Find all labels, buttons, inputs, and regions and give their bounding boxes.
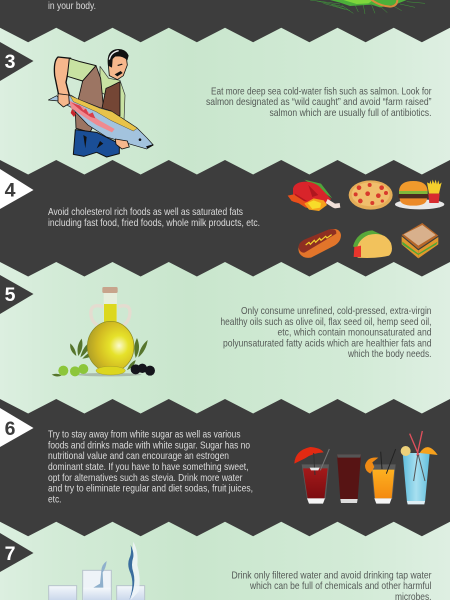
tip 6 text: nutritional value and can encourage an estrogen: [48, 451, 229, 462]
tip 4 text: including fast food, fried foods, whole milk products, etc.: [48, 218, 260, 229]
olive branches: [70, 338, 148, 370]
tip 6 text: and try to eliminate regular and diet sodas, fruit juices,: [48, 483, 253, 494]
body: [87, 321, 134, 372]
tip 6 text: dominant state. If you have to have something sweet,: [48, 462, 248, 473]
tip 7 text: [232, 571, 432, 600]
glass: with splash: [117, 542, 145, 600]
illustration: glasses of water: [49, 542, 145, 600]
tip 2 text: in your body.: [48, 1, 96, 12]
number badge 4: [0, 169, 34, 209]
shadow: [75, 373, 142, 376]
number badge 6: 6: [5, 418, 16, 440]
glass: half filled: [83, 561, 111, 600]
tip 6 text: Try to stay away from white sugar as well as various: [48, 430, 240, 441]
icon: taco: [353, 230, 392, 258]
icon: chicken leg: [288, 180, 340, 211]
illustration: olive oil bottle with olives: [52, 287, 155, 377]
glass: empty: [49, 586, 77, 600]
icon: leafy plant base: [310, 0, 425, 14]
panel: tip 4 band: [0, 160, 450, 276]
drink: cola: [337, 454, 361, 503]
icon: burger and fries: [395, 180, 444, 209]
panel: tip 3 fish: [0, 42, 432, 157]
tip 6 text: foods and drinks made with white sugar. Sugar has no: [48, 440, 250, 451]
number badge 6: [0, 408, 34, 447]
tip 5 text: which the body needs.: [347, 349, 432, 360]
illustration: man holding salmon: [48, 49, 153, 157]
tip 6 text: etc.: [48, 494, 62, 505]
panel: tip 6 band: [0, 399, 450, 536]
green olives: [52, 364, 88, 377]
panel: tip 7 water: [0, 533, 432, 600]
illustration: fast foods: [288, 180, 444, 258]
icon: hot dog: [298, 229, 341, 258]
number badge 3: 3: [5, 51, 16, 73]
tip 5 text: [220, 306, 432, 360]
drink: orange: [365, 449, 396, 504]
panel: tip 5 oil: [0, 275, 432, 377]
icon: sandwich: [402, 223, 438, 258]
tip 4 text: [48, 207, 260, 229]
number badge 5: 5: [5, 284, 16, 306]
tip 6 text: [48, 430, 253, 505]
number badge 7: 7: [5, 543, 15, 565]
neck: [104, 293, 117, 323]
icon: pizza: [349, 180, 393, 210]
tip 3 text: [206, 86, 432, 119]
black olives: [131, 364, 155, 376]
number badge 7: [0, 533, 34, 572]
drink: red with umbrella: [294, 447, 329, 504]
number badge 3: [0, 42, 34, 81]
drink: blue with straws: [401, 431, 438, 504]
tip 4 text: Avoid cholesterol rich foods as well as saturated fats: [48, 207, 243, 218]
number badge 4: 4: [5, 180, 16, 202]
handles: [91, 306, 130, 326]
illustration: four drinks: [294, 431, 438, 504]
tip 6 text: opt for alternatives such as stevia. Drink more water: [48, 473, 243, 484]
number badge 5: [0, 275, 34, 314]
panel: tip 2 dark band end: [0, 0, 450, 42]
